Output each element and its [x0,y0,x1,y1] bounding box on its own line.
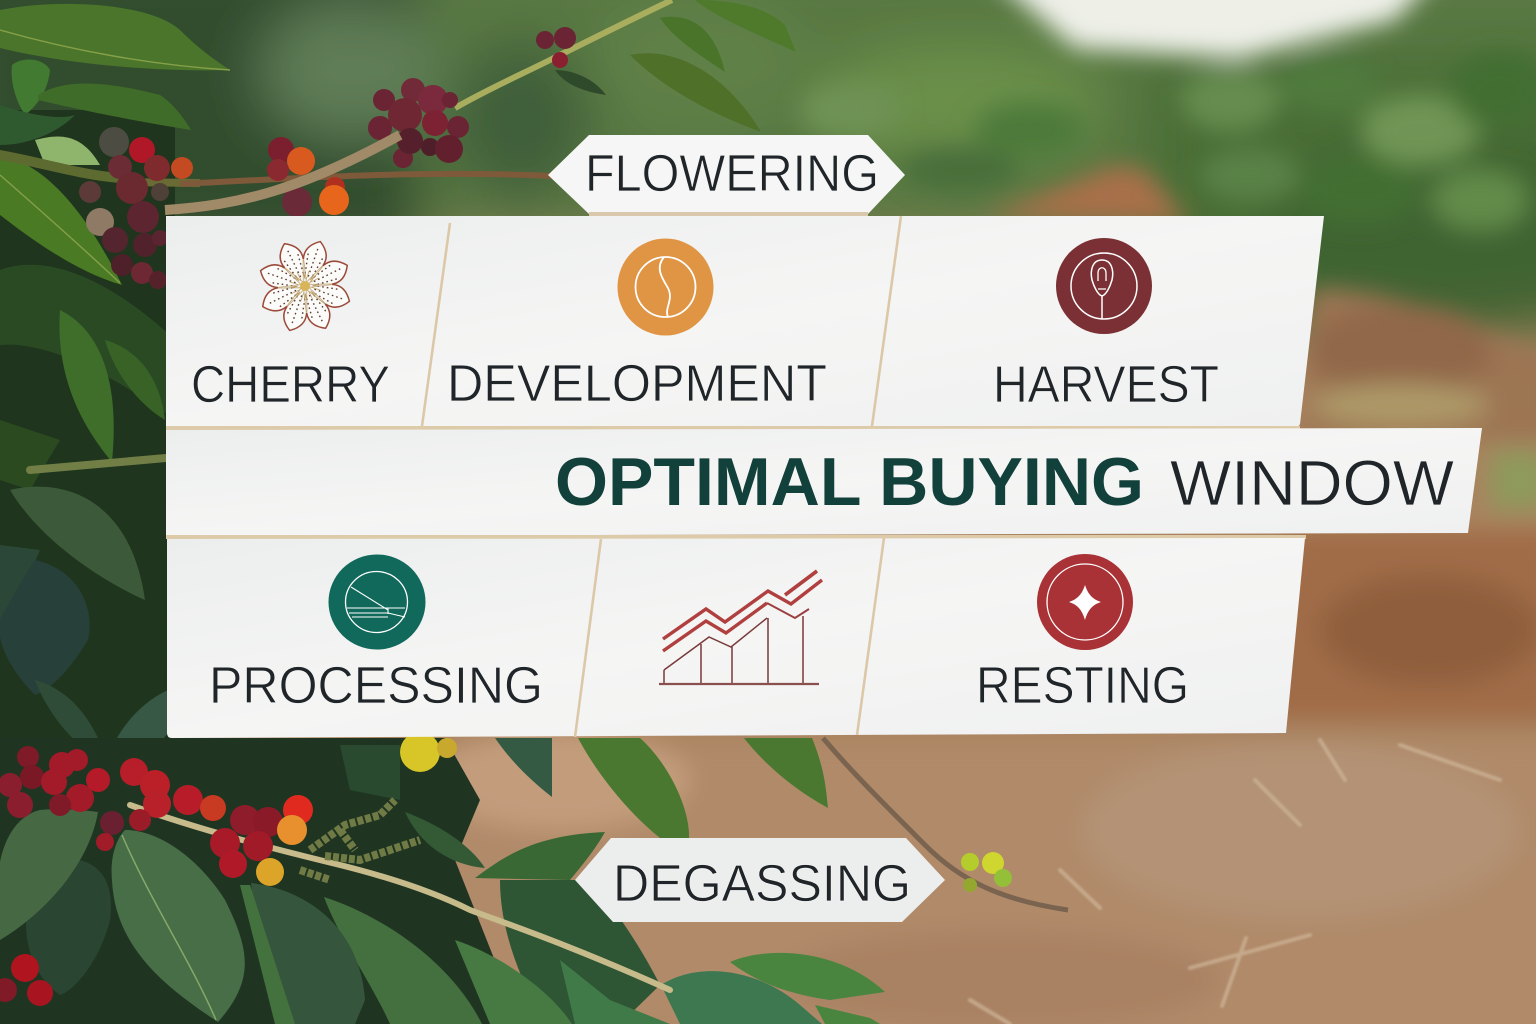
lower branch with red cherries [0,746,670,1006]
tan strip above bottom row [166,535,1306,539]
flowering tag [548,135,905,214]
foliage: left column behind the sign [0,110,175,770]
text: resting: RESTING [976,657,1189,715]
icon: harvest badge [1056,238,1152,334]
foliage: top-right leaves [555,0,796,132]
heading: optimal buying: OPTIMAL BUYING [555,444,1144,520]
flowering label: FLOWERING [585,145,879,203]
tan strip under flowering tag [589,212,868,216]
panel: bottom row [167,538,1305,738]
text: development: DEVELOPMENT [447,355,827,413]
icon: flower [257,238,353,334]
panel: optimal buying window band [166,428,1482,536]
foliage: top-left leaves [0,4,230,285]
icon: processing badge [328,554,426,650]
panel: bottom dividers [575,538,884,737]
branches with ripe coffee cherries, top [0,0,672,289]
icon: resting badge [1037,554,1133,650]
text: harvest: HARVEST [993,356,1219,414]
text: cherry: CHERRY [191,356,390,414]
foliage: lower-left dark backdrop [0,732,552,1024]
tan strip above middle band [166,426,1300,430]
panel: top row [166,216,1324,427]
chart: rising price lines [659,571,822,684]
degassing tag [575,838,945,922]
panel: top dividers [422,216,901,426]
thin branch with green berries [823,738,1068,910]
degassing label: DEGASSING [613,855,911,913]
text: processing: PROCESSING [209,657,543,715]
icon: coffee bean [618,238,714,336]
foliage: bottom leaves around degassing tag [0,809,885,1024]
foliage: leaves hanging under the sign [578,738,828,838]
heading: window: WINDOW [1170,447,1455,519]
